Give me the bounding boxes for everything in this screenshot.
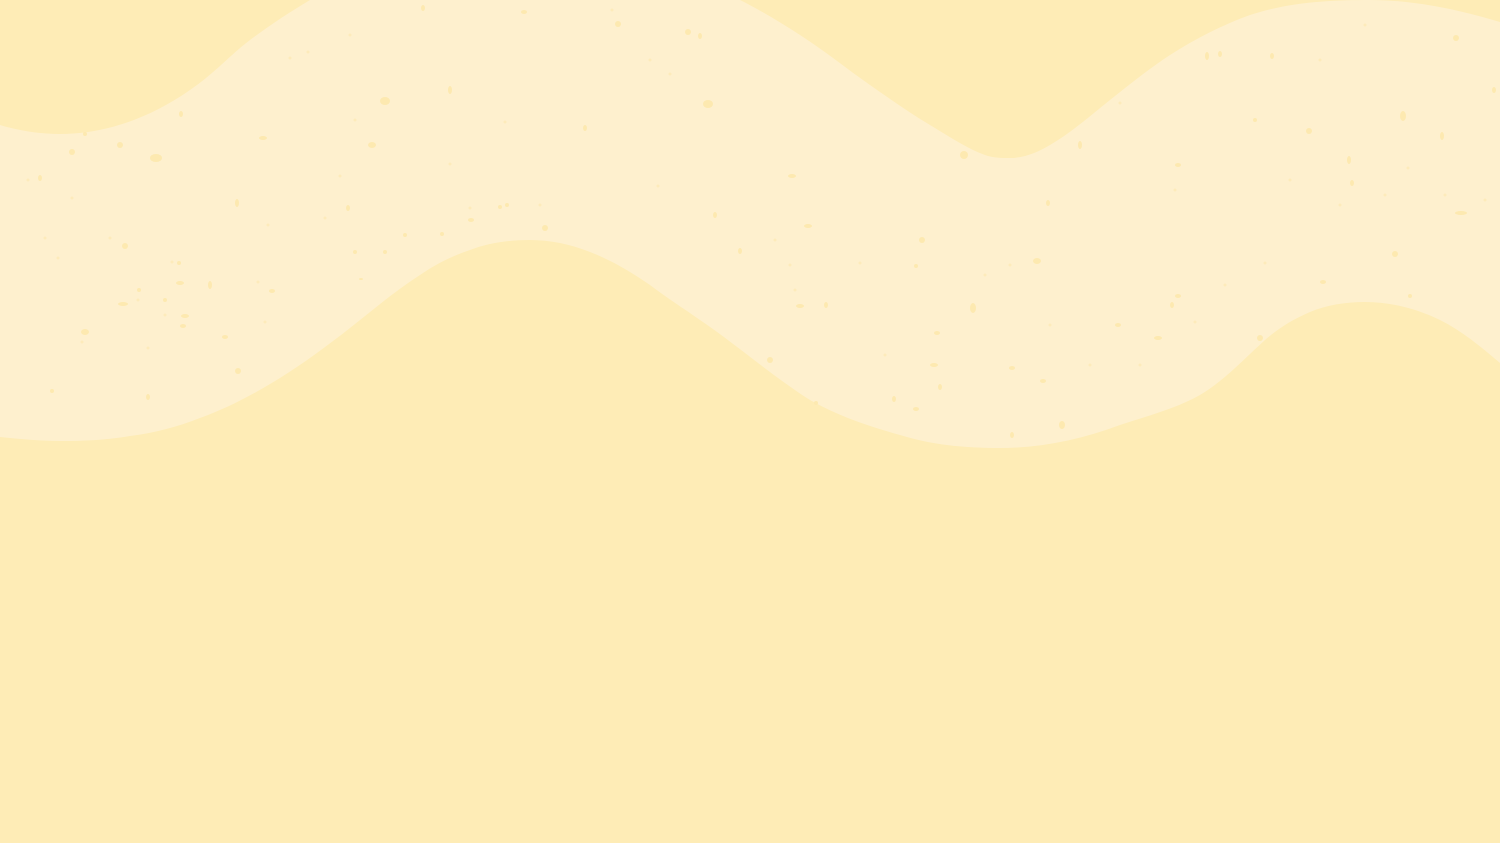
wavy band (0, 0, 1500, 448)
speckles on band (38, 5, 1496, 438)
